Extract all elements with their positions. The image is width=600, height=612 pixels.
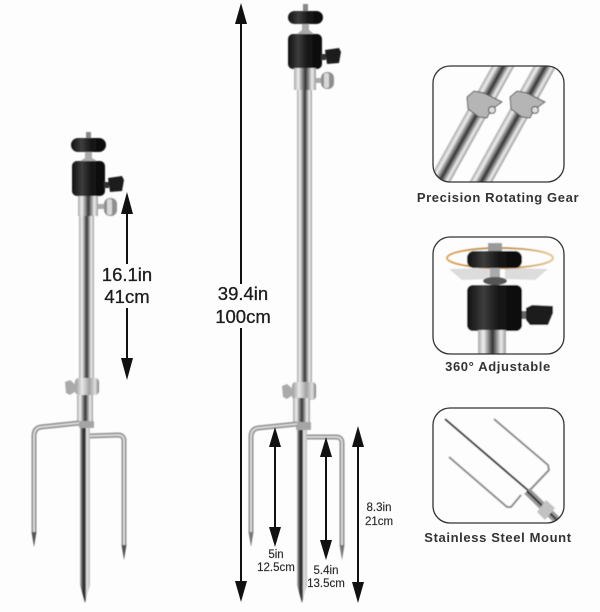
label: 39.4in 100cm: 39.4in (218, 283, 268, 304)
label: 5in 12.5cm: 5in (268, 549, 284, 561)
label: 5.4in 13.5cm: 5.4in (314, 565, 338, 577)
arrow: 8.3in fork (352, 426, 364, 603)
rotating clamp (65, 378, 99, 428)
ball head (71, 132, 124, 196)
panel: 360 adjustable (433, 237, 564, 356)
label: 8.3in 21cm (365, 502, 393, 528)
card frame (433, 66, 564, 182)
label: 5in 12.5cm (257, 549, 295, 574)
label: 5.4in 13.5cm (307, 565, 345, 590)
telescopic pole (294, 68, 334, 382)
caption: precision rotating gear: Precision Rotating Gear (417, 190, 579, 205)
caption: 360 adjustable: 360° Adjustable (445, 359, 551, 374)
arrow: 5in tine (269, 427, 281, 547)
panel: precision rotating gear (432, 65, 565, 183)
arrow: 16.1in height (121, 192, 133, 380)
label: 16.1in 41cm: 16.1in (102, 264, 152, 285)
arrow: 5.4in tine (320, 437, 332, 560)
fork tines (248, 424, 344, 603)
photo: two rotating clamps on tubes (434, 66, 556, 182)
right stake (tall) (248, 4, 344, 603)
photo: fork tines (444, 418, 560, 522)
label: 8.3in 21cm: 8.3in (367, 502, 391, 514)
label: 5.4in 13.5cm: 13.5cm (307, 578, 345, 590)
label: 16.1in 41cm (98, 264, 156, 308)
panel: stainless steel mount (433, 408, 564, 525)
label: 16.1in 41cm: 41cm (104, 286, 150, 307)
telescopic pole (78, 196, 117, 380)
ball head (288, 4, 341, 69)
label: 39.4in 100cm: 100cm (215, 306, 271, 327)
rotating clamp (282, 382, 316, 430)
arrow: 39.4in height (235, 3, 247, 602)
label: 39.4in 100cm (210, 283, 276, 328)
card frame (433, 237, 564, 354)
fork tines (32, 423, 126, 603)
photo: ball head with rotation ring (446, 242, 554, 354)
caption: stainless steel mount: Stainless Steel Mount (424, 530, 572, 545)
label: 8.3in 21cm: 21cm (365, 516, 393, 528)
left stake (short) (32, 132, 126, 603)
label: 5in 12.5cm: 12.5cm (257, 562, 295, 574)
card frame (433, 408, 564, 523)
